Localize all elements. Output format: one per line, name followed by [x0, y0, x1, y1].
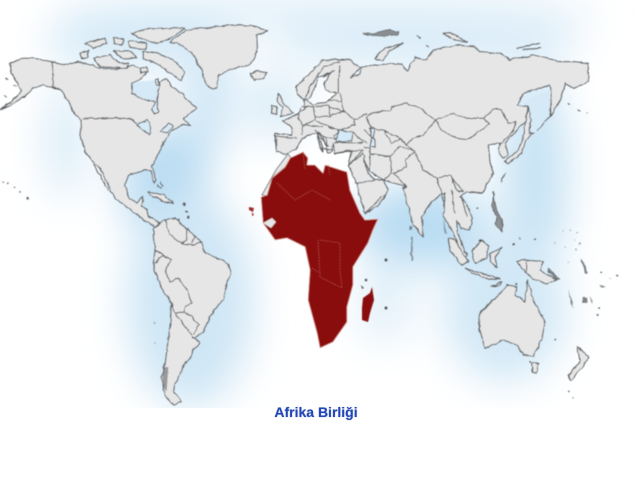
Canary and Indian Ocean islands [249, 207, 388, 310]
Canadian Arctic islands [80, 28, 185, 85]
Sulawesi [490, 247, 502, 268]
New Zealand [568, 347, 588, 381]
Morocco and Western Sahara [262, 154, 291, 196]
Greenland [170, 25, 267, 89]
New Guinea [517, 260, 557, 284]
Japan and Sakhalin [505, 107, 533, 163]
Southeast Asia and Oceania [409, 197, 619, 398]
Java and Lesser Sunda [465, 268, 502, 287]
African internal borders [277, 152, 342, 288]
Africa [261, 152, 378, 348]
Madagascar [362, 287, 374, 322]
Tasmania [532, 363, 538, 373]
South America [153, 218, 231, 405]
Okhotsk and Japan seas [508, 88, 550, 157]
Caribbean islands [148, 182, 173, 203]
Eurasia [271, 30, 588, 258]
UK and Ireland [271, 93, 293, 117]
title: Afrika Birliği [274, 404, 358, 420]
Hudson Bay water [132, 80, 161, 113]
Pacific islands [409, 217, 619, 398]
Asia borders [335, 103, 515, 217]
Black Sea and Caspian [333, 127, 376, 147]
ocean glow [44, 0, 600, 408]
Europe borders [275, 62, 375, 150]
Iceland [250, 71, 267, 80]
Hawaii [3, 181, 29, 200]
Sumatra [448, 238, 468, 265]
North America [0, 25, 267, 227]
Borneo [472, 240, 488, 263]
Kuril islands [537, 103, 588, 131]
Philippines [492, 197, 503, 232]
Australia [479, 280, 545, 357]
Arctic islands of Russia [375, 43, 403, 61]
Gambia notch [263, 218, 276, 228]
